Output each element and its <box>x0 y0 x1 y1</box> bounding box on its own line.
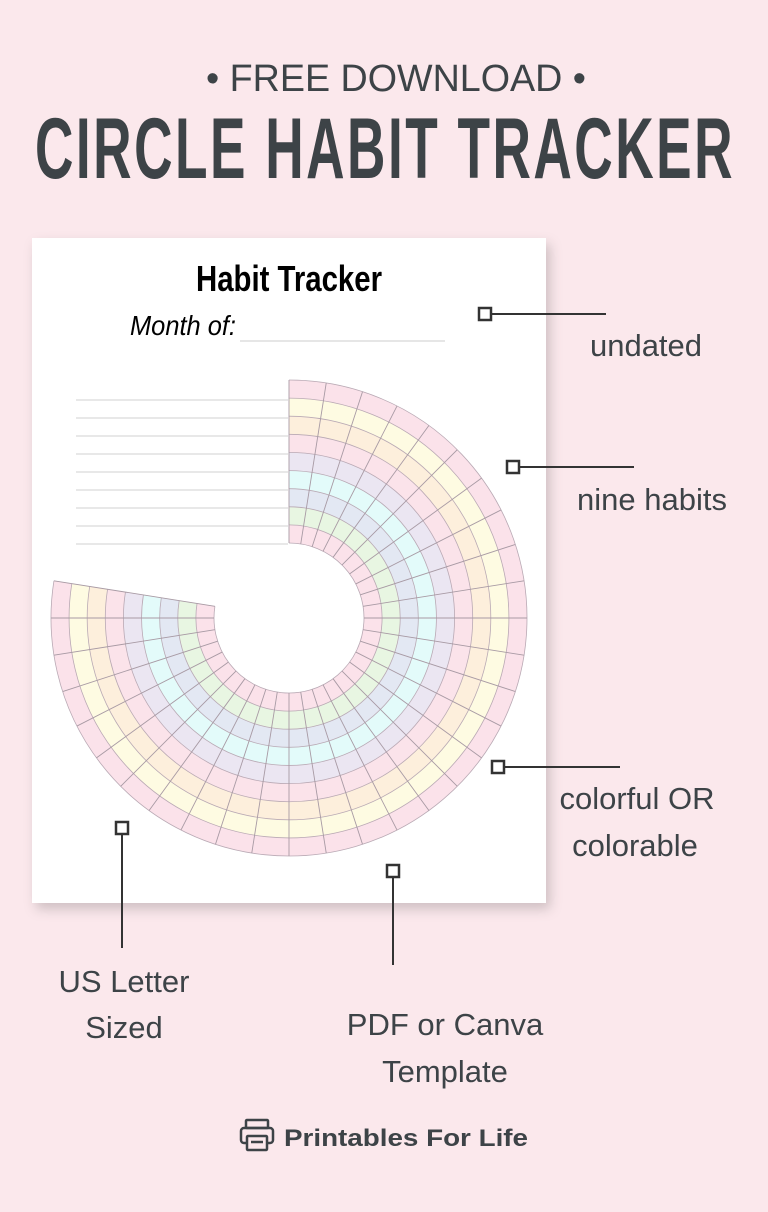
footer brand <box>241 1120 528 1152</box>
callout: colorful or colorable: colorable <box>572 828 698 863</box>
callout: US letter sized: Sized <box>85 1010 163 1045</box>
callout: undated <box>479 308 702 363</box>
callout: undated: undated <box>590 328 702 363</box>
callout: colorful or colorable <box>492 761 715 863</box>
icon: printer <box>241 1120 273 1150</box>
callout: US letter sized: US Letter <box>59 964 189 999</box>
callout: PDF or Canva template <box>347 865 544 1089</box>
habit name lines <box>76 400 288 544</box>
footer brand: Printables For Life <box>284 1125 528 1152</box>
callout: US letter sized <box>59 822 189 1045</box>
sheet heading: Habit Tracker <box>196 258 382 299</box>
subtitle: free download: • FREE DOWNLOAD • <box>206 58 586 100</box>
callout: nine habits <box>507 461 727 517</box>
month of field: Month of: <box>130 310 236 341</box>
panel: printable sheet <box>32 238 546 903</box>
callout: nine habits: nine habits <box>577 482 727 517</box>
callout: colorful or colorable: colorful OR <box>559 781 715 816</box>
callout: PDF or Canva template: Template <box>382 1054 508 1089</box>
circular tracker chart <box>51 380 527 856</box>
callout: PDF or Canva template: PDF or Canva <box>347 1007 544 1042</box>
